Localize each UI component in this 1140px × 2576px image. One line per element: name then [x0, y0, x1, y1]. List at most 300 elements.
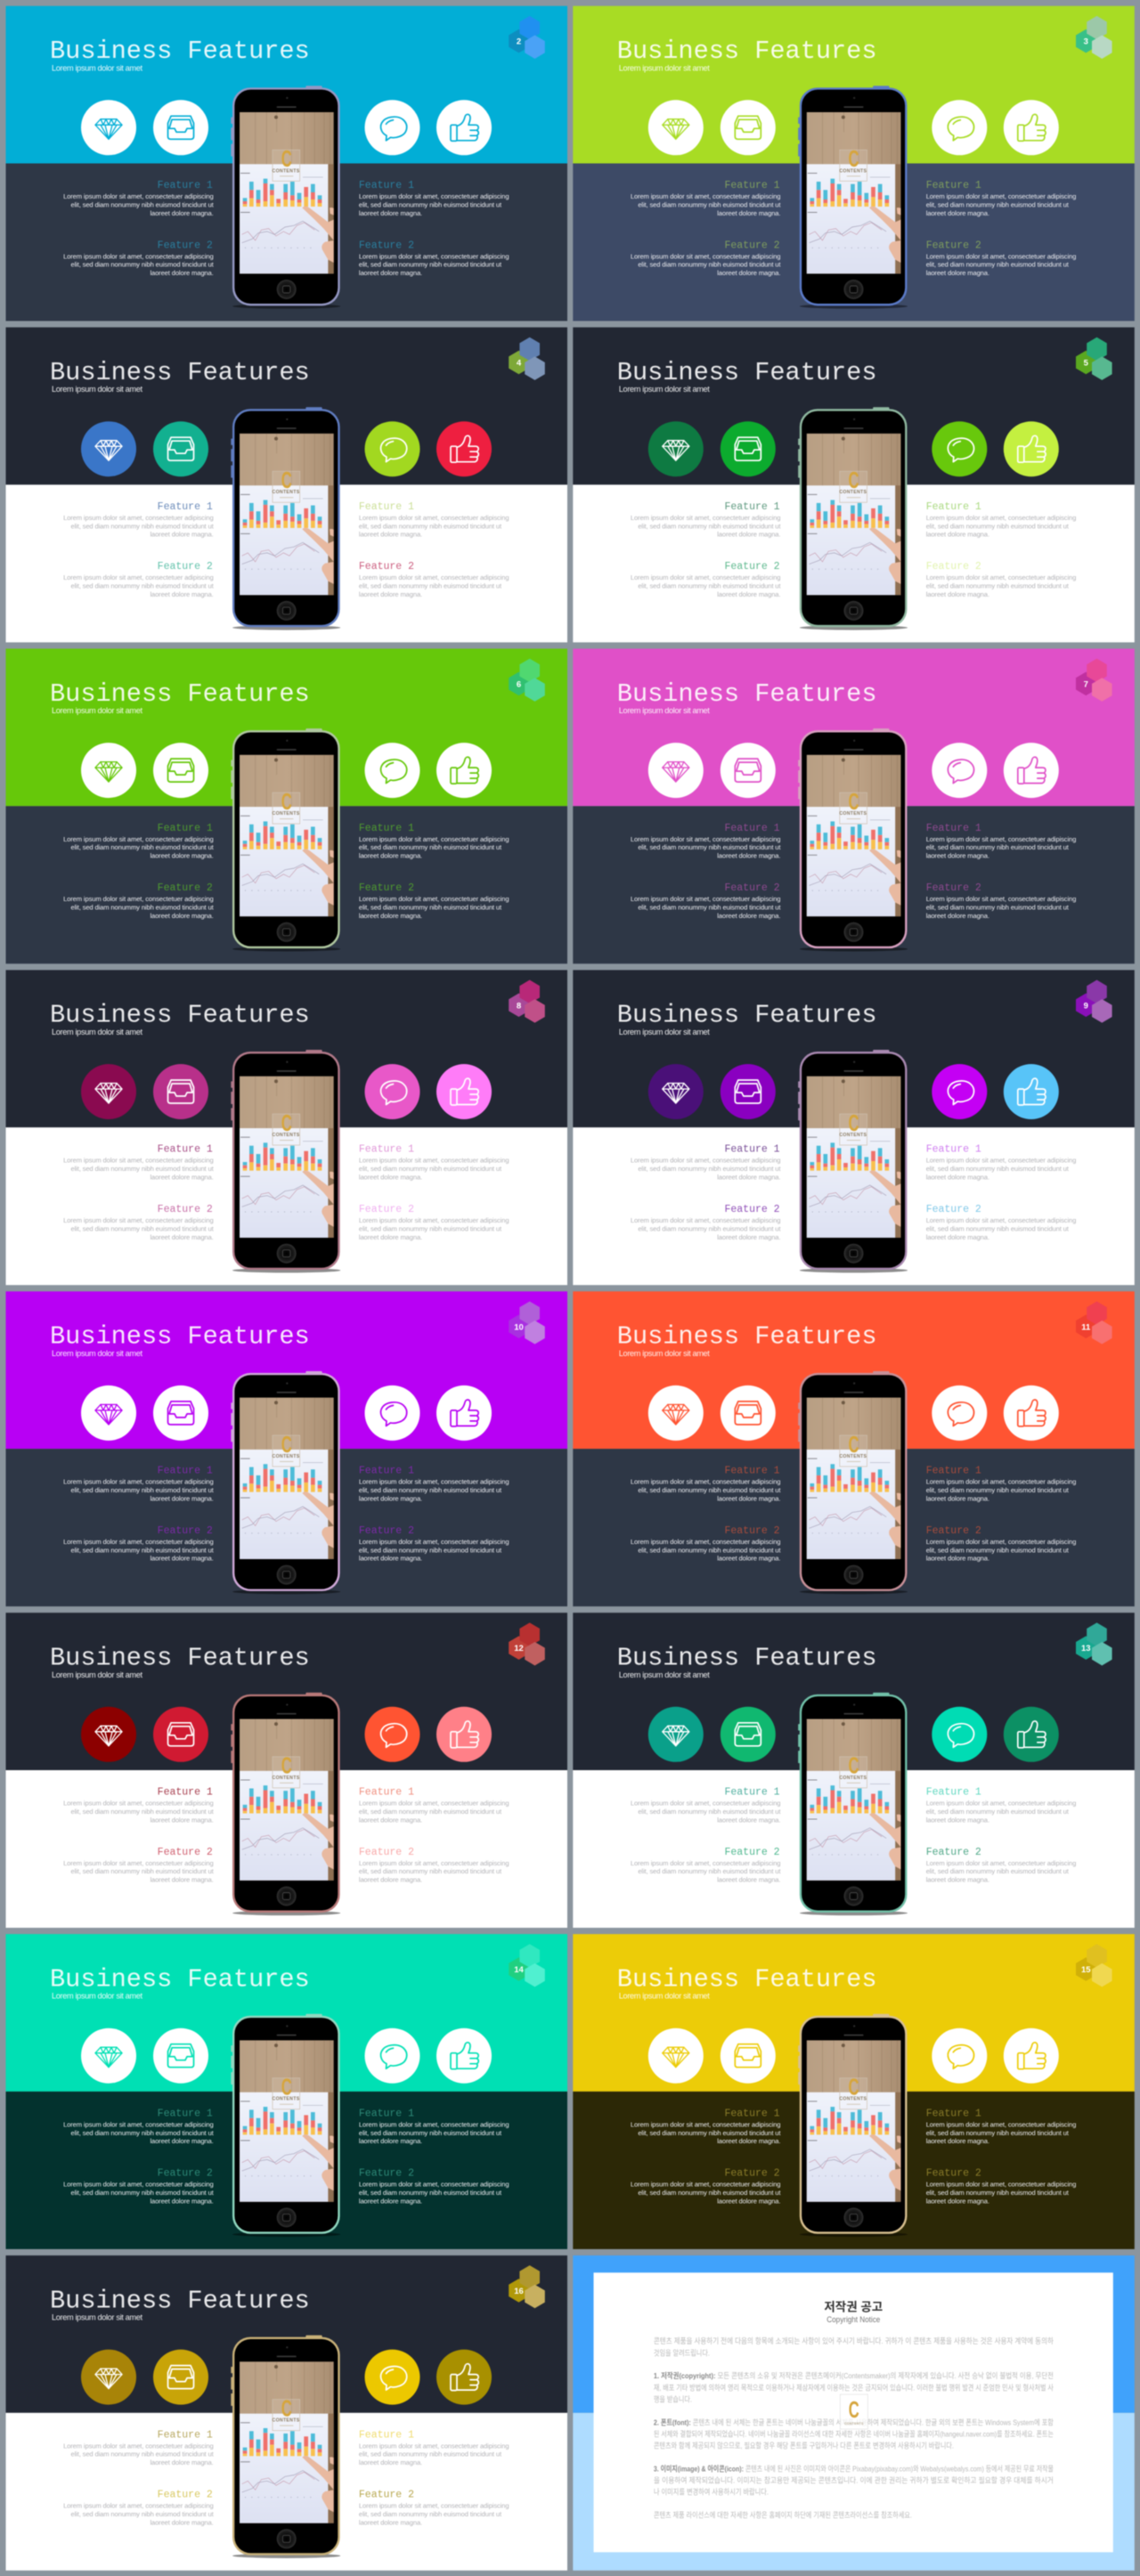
feature right 2: laoreet dolore magna.	[359, 1876, 422, 1884]
feature left 1	[63, 180, 215, 217]
feature right 1: laoreet dolore magna.	[926, 1174, 989, 1182]
feature right 2: Feature 2	[359, 882, 414, 894]
feature left 1	[63, 1144, 215, 1181]
feature left 1: Lorem ipsum dolor sit amet, consectetuer adipiscing	[63, 514, 214, 522]
icon: thumbs up	[1004, 743, 1059, 798]
feature left 1: Feature 1	[158, 2429, 213, 2441]
section 1 copyright: 재, 배포 기타 방법에 의하여 영리 목적으로 이용하거나 제삼자에게 이용하는 것은 금지되어 있습니다. 이러한 불법 행위 발견 시 준엄한 민사 및 형사처벌 사	[654, 2382, 1054, 2392]
feature left 2	[63, 561, 215, 598]
logo badge	[840, 2394, 867, 2429]
icon: tray	[153, 743, 208, 798]
feature left 2: laoreet dolore magna.	[150, 2198, 214, 2206]
phone: C	[848, 2074, 859, 2101]
panel: slide 13	[573, 1613, 1135, 1928]
feature left 2	[63, 1204, 215, 1241]
icon: diamond	[648, 2028, 704, 2084]
feature right 2: Lorem ipsum dolor sit amet, consectetuer adipiscing	[359, 895, 509, 903]
phone: C	[281, 1431, 292, 1458]
feature left 1: Feature 1	[724, 1144, 780, 1156]
icon: speech bubble	[365, 2350, 420, 2405]
page number badge	[1076, 1622, 1112, 1665]
feature right 1: elit, sed diam nonummy nibh euismod tincidunt ut	[359, 843, 502, 851]
subtitle: Lorem ipsum dolor sit amet	[52, 706, 142, 715]
section 3 image and icon: 을 이용하여 제작되었습니다. 이미지는 참고용만 제공되는 콘텐츠입니다. 이에 관한 권리는 귀하가 별도로 확인하고 필요할 경우 대체를 하시거	[654, 2475, 1054, 2485]
page number badge: 15	[1081, 1965, 1091, 1975]
feature left 1: laoreet dolore magna.	[150, 2137, 214, 2145]
feature right 1: laoreet dolore magna.	[359, 2458, 422, 2466]
feature right 1: laoreet dolore magna.	[926, 1494, 989, 1502]
feature left 1	[631, 1786, 781, 1824]
feature left 2: elit, sed diam nonummy nibh euismod tincidunt ut	[71, 582, 215, 590]
feature right 2: Feature 2	[359, 561, 414, 573]
page number badge: 5	[1084, 359, 1089, 369]
panel: slide 12	[5, 1613, 567, 1928]
icon: thumbs up	[436, 2350, 492, 2405]
feature right 1: laoreet dolore magna.	[359, 209, 422, 217]
feature right 2	[359, 882, 509, 920]
feature left 2: Feature 2	[158, 2168, 213, 2180]
feature left 2: Feature 2	[724, 1204, 780, 1215]
feature left 1: Lorem ipsum dolor sit amet, consectetuer adipiscing	[63, 1157, 214, 1165]
feature right 1	[926, 1144, 1076, 1181]
page number badge	[1076, 980, 1112, 1023]
feature left 2: Feature 2	[724, 240, 780, 251]
feature right 1: Feature 1	[926, 501, 981, 513]
icon: tray	[153, 1064, 208, 1119]
phone: CONTENTS	[273, 2097, 300, 2102]
feature left 2	[631, 561, 781, 598]
feature left 1: Lorem ipsum dolor sit amet, consectetuer adipiscing	[631, 1478, 780, 1486]
feature left 2: Lorem ipsum dolor sit amet, consectetuer adipiscing	[631, 573, 780, 581]
feature right 1: Feature 1	[926, 1144, 981, 1156]
feature left 1: elit, sed diam nonummy nibh euismod tincidunt ut	[638, 200, 781, 208]
feature right 1: laoreet dolore magna.	[926, 209, 989, 217]
feature right 1: Lorem ipsum dolor sit amet, consectetuer adipiscing	[926, 514, 1076, 522]
logo badge: C	[849, 2396, 859, 2423]
feature left 2: Feature 2	[724, 561, 780, 573]
feature right 2: Lorem ipsum dolor sit amet, consectetuer adipiscing	[359, 2181, 509, 2189]
phone: CONTENTS	[839, 811, 867, 817]
feature left 2: elit, sed diam nonummy nibh euismod tincidunt ut	[71, 1867, 215, 1875]
phone: C	[848, 1431, 859, 1458]
bottom band	[5, 2413, 567, 2571]
feature right 2	[926, 561, 1076, 598]
feature right 1: Lorem ipsum dolor sit amet, consectetuer adipiscing	[359, 2120, 509, 2128]
subtitle: Lorem ipsum dolor sit amet	[619, 706, 710, 715]
feature left 1: elit, sed diam nonummy nibh euismod tincidunt ut	[71, 1486, 215, 1494]
page number badge	[509, 1301, 545, 1345]
feature left 2: Lorem ipsum dolor sit amet, consectetuer adipiscing	[631, 895, 780, 903]
panel: slide 4	[5, 328, 567, 642]
feature right 2: Feature 2	[926, 561, 981, 573]
feature right 2: elit, sed diam nonummy nibh euismod tincidunt ut	[359, 1224, 502, 1232]
icon: tray	[721, 2028, 776, 2084]
bottom band	[5, 1770, 567, 1928]
feature left 1: elit, sed diam nonummy nibh euismod tincidunt ut	[71, 522, 215, 530]
feature left 1: elit, sed diam nonummy nibh euismod tincidunt ut	[71, 1165, 215, 1173]
icon: speech bubble	[365, 421, 420, 476]
feature left 2	[631, 1847, 781, 1884]
page number badge: 2	[517, 37, 521, 47]
phone: CONTENTS	[839, 1133, 867, 1138]
phone	[798, 407, 908, 630]
bottom band	[5, 806, 567, 963]
feature left 1: Lorem ipsum dolor sit amet, consectetuer adipiscing	[63, 2120, 214, 2128]
feature right 2	[926, 882, 1076, 920]
icon: tray	[721, 1386, 776, 1441]
feature left 2: Lorem ipsum dolor sit amet, consectetuer adipiscing	[631, 1859, 780, 1867]
feature right 1: Feature 1	[359, 1144, 414, 1156]
panel: slide 16	[5, 2255, 567, 2571]
icon: thumbs up	[1004, 100, 1059, 155]
feature left 2: elit, sed diam nonummy nibh euismod tincidunt ut	[638, 582, 781, 590]
icon: diamond	[648, 421, 704, 476]
phone: CONTENTS	[273, 168, 300, 174]
feature left 1: laoreet dolore magna.	[717, 1174, 780, 1182]
feature right 1	[926, 180, 1076, 217]
icon: speech bubble	[365, 2028, 420, 2084]
feature right 2	[926, 2168, 1076, 2205]
feature right 2	[359, 1525, 509, 1563]
feature left 1: elit, sed diam nonummy nibh euismod tincidunt ut	[71, 843, 215, 851]
feature right 1: Lorem ipsum dolor sit amet, consectetuer adipiscing	[359, 1157, 509, 1165]
feature right 1: laoreet dolore magna.	[359, 531, 422, 539]
feature right 1: Feature 1	[359, 2429, 414, 2441]
subtitle: Lorem ipsum dolor sit amet	[52, 385, 142, 394]
feature right 1: laoreet dolore magna.	[359, 1816, 422, 1824]
icon: thumbs up	[436, 1386, 492, 1441]
feature left 1: elit, sed diam nonummy nibh euismod tincidunt ut	[638, 1808, 781, 1816]
feature right 1	[359, 1786, 509, 1824]
feature right 1: laoreet dolore magna.	[359, 2137, 422, 2145]
feature right 2: laoreet dolore magna.	[926, 1876, 989, 1884]
feature left 2: elit, sed diam nonummy nibh euismod tincidunt ut	[71, 261, 215, 269]
feature right 2	[359, 1847, 509, 1884]
feature right 1	[359, 1466, 509, 1502]
feature left 2: laoreet dolore magna.	[717, 269, 780, 277]
feature right 2	[926, 1525, 1076, 1563]
feature left 2: laoreet dolore magna.	[717, 1876, 780, 1884]
feature left 1: laoreet dolore magna.	[717, 209, 780, 217]
feature left 2	[63, 2490, 215, 2526]
icon: thumbs up	[436, 1707, 492, 1762]
feature left 2: laoreet dolore magna.	[717, 1233, 780, 1241]
feature right 1	[926, 501, 1076, 539]
feature left 1: laoreet dolore magna.	[717, 1816, 780, 1824]
feature right 2: laoreet dolore magna.	[359, 1555, 422, 1563]
feature right 2: Lorem ipsum dolor sit amet, consectetuer adipiscing	[926, 573, 1076, 581]
feature left 1: laoreet dolore magna.	[150, 1174, 214, 1182]
top band	[573, 6, 1135, 164]
feature left 1: Lorem ipsum dolor sit amet, consectetuer adipiscing	[63, 1478, 214, 1486]
feature right 2: elit, sed diam nonummy nibh euismod tincidunt ut	[359, 2189, 502, 2197]
feature left 2: elit, sed diam nonummy nibh euismod tincidunt ut	[638, 2189, 781, 2197]
feature right 2: Feature 2	[359, 1204, 414, 1215]
top band	[5, 1934, 567, 2092]
icon: speech bubble	[932, 2028, 987, 2084]
icon: thumbs up	[436, 2028, 492, 2084]
feature left 1: Lorem ipsum dolor sit amet, consectetuer adipiscing	[63, 835, 214, 843]
feature left 2: elit, sed diam nonummy nibh euismod tincidunt ut	[638, 1546, 781, 1554]
top band	[5, 1291, 567, 1449]
feature right 1	[926, 1466, 1076, 1502]
feature left 2: laoreet dolore magna.	[150, 1555, 214, 1563]
page number badge	[509, 659, 545, 702]
feature right 1: elit, sed diam nonummy nibh euismod tincidunt ut	[359, 1808, 502, 1816]
feature right 1: elit, sed diam nonummy nibh euismod tincidunt ut	[359, 2129, 502, 2137]
feature left 1: laoreet dolore magna.	[150, 1494, 214, 1502]
feature left 1: elit, sed diam nonummy nibh euismod tincidunt ut	[638, 1486, 781, 1494]
feature right 1: Lorem ipsum dolor sit amet, consectetuer adipiscing	[359, 1478, 509, 1486]
icon: thumbs up	[1004, 1707, 1059, 1762]
feature right 2	[359, 1204, 509, 1241]
page number badge: 13	[1081, 1644, 1091, 1654]
feature left 1: Lorem ipsum dolor sit amet, consectetuer adipiscing	[63, 2442, 214, 2450]
phone: CONTENTS	[839, 490, 867, 495]
phone	[798, 1371, 908, 1594]
feature right 2	[359, 561, 509, 598]
title: Business Features	[617, 1643, 877, 1672]
section 1 copyright	[654, 2370, 1054, 2404]
feature left 1: Lorem ipsum dolor sit amet, consectetuer adipiscing	[631, 835, 780, 843]
feature right 1: elit, sed diam nonummy nibh euismod tincidunt ut	[926, 1486, 1070, 1494]
feature right 2: elit, sed diam nonummy nibh euismod tincidunt ut	[359, 903, 502, 912]
feature left 2: Lorem ipsum dolor sit amet, consectetuer adipiscing	[63, 2502, 214, 2510]
feature left 2: elit, sed diam nonummy nibh euismod tincidunt ut	[638, 903, 781, 912]
page number badge: 11	[1081, 1322, 1091, 1332]
feature right 2: Lorem ipsum dolor sit amet, consectetuer adipiscing	[359, 573, 509, 581]
icon: diamond	[648, 100, 704, 155]
feature left 2: Lorem ipsum dolor sit amet, consectetuer adipiscing	[63, 1538, 214, 1546]
icon: speech bubble	[932, 100, 987, 155]
page number badge: 14	[514, 1965, 524, 1975]
phone: C	[848, 1752, 859, 1779]
page number badge: 9	[1084, 1001, 1088, 1011]
phone	[798, 2014, 908, 2237]
phone	[231, 2336, 340, 2558]
feature left 2: Lorem ipsum dolor sit amet, consectetuer adipiscing	[631, 252, 780, 260]
phone	[231, 85, 340, 309]
icon: tray	[153, 2350, 208, 2405]
feature right 2	[926, 1204, 1076, 1241]
feature left 2: Lorem ipsum dolor sit amet, consectetuer adipiscing	[631, 2181, 780, 2189]
bottom band	[5, 1127, 567, 1285]
feature left 2	[631, 1204, 781, 1241]
feature left 2: laoreet dolore magna.	[150, 1233, 214, 1241]
feature right 2: elit, sed diam nonummy nibh euismod tincidunt ut	[926, 261, 1070, 269]
icon: tray	[153, 100, 208, 155]
feature left 2: laoreet dolore magna.	[717, 2198, 780, 2206]
feature left 1: elit, sed diam nonummy nibh euismod tincidunt ut	[71, 2450, 215, 2458]
feature left 2: Lorem ipsum dolor sit amet, consectetuer adipiscing	[63, 895, 214, 903]
feature right 2: elit, sed diam nonummy nibh euismod tincidunt ut	[926, 1546, 1070, 1554]
feature left 2: Feature 2	[724, 882, 780, 894]
feature right 1: elit, sed diam nonummy nibh euismod tincidunt ut	[359, 1486, 502, 1494]
panel: slide 11	[573, 1291, 1135, 1606]
top band	[5, 648, 567, 806]
phone	[231, 1050, 340, 1272]
feature right 1: elit, sed diam nonummy nibh euismod tincidunt ut	[926, 200, 1070, 208]
phone: C	[281, 1752, 292, 1779]
phone: CONTENTS	[273, 2418, 300, 2424]
feature left 2: elit, sed diam nonummy nibh euismod tincidunt ut	[638, 1867, 781, 1875]
icon: thumbs up	[1004, 421, 1059, 476]
page number badge: 6	[517, 680, 521, 689]
page number badge: 7	[1084, 680, 1088, 689]
feature left 1: Feature 1	[158, 823, 213, 834]
feature left 1: Lorem ipsum dolor sit amet, consectetuer adipiscing	[63, 192, 214, 200]
feature right 2: laoreet dolore magna.	[359, 1233, 422, 1241]
phone	[231, 728, 340, 951]
title: Business Features	[50, 1964, 310, 1994]
feature right 1: laoreet dolore magna.	[926, 852, 989, 860]
top band	[5, 970, 567, 1127]
phone	[798, 85, 908, 309]
top band	[573, 2255, 1135, 2413]
phone: C	[281, 145, 292, 172]
feature right 2: elit, sed diam nonummy nibh euismod tincidunt ut	[359, 1867, 502, 1875]
icon: tray	[721, 421, 776, 476]
top band	[573, 648, 1135, 806]
feature right 1	[359, 1144, 509, 1181]
feature right 2: laoreet dolore magna.	[926, 1233, 989, 1241]
title: Business Features	[50, 358, 310, 387]
feature right 1: laoreet dolore magna.	[926, 1816, 989, 1824]
feature right 2: Feature 2	[359, 1847, 414, 1858]
phone	[231, 407, 340, 630]
subheading: Copyright Notice	[826, 2315, 880, 2325]
feature left 1	[63, 2108, 215, 2145]
icon: thumbs up	[436, 100, 492, 155]
feature right 1: Feature 1	[359, 501, 414, 513]
subtitle: Lorem ipsum dolor sit amet	[619, 1349, 710, 1358]
section 3 image and icon: 3. 이미지(image) & 아이콘(icon): 콘텐츠 내에 된 사진은 이미지와 아이콘은 Pixabay(pixabay.com)와 Webalys(webalys.com) 등에서 제공된 무료 저작물	[654, 2463, 1054, 2473]
feature right 1: laoreet dolore magna.	[926, 2137, 989, 2145]
feature right 2: Lorem ipsum dolor sit amet, consectetuer adipiscing	[359, 1216, 509, 1224]
feature left 1: elit, sed diam nonummy nibh euismod tincidunt ut	[638, 843, 781, 851]
page number badge	[509, 1944, 545, 1987]
feature right 1: elit, sed diam nonummy nibh euismod tincidunt ut	[926, 1165, 1070, 1173]
feature left 1: elit, sed diam nonummy nibh euismod tincidunt ut	[638, 522, 781, 530]
feature left 2	[631, 882, 781, 920]
phone: CONTENTS	[839, 2097, 867, 2102]
feature right 1: Lorem ipsum dolor sit amet, consectetuer adipiscing	[926, 192, 1076, 200]
feature left 1	[631, 1144, 781, 1181]
subtitle: Lorem ipsum dolor sit amet	[619, 1670, 710, 1679]
icon: speech bubble	[365, 100, 420, 155]
bottom band	[5, 164, 567, 321]
title: Business Features	[50, 1643, 310, 1672]
page number badge: 12	[514, 1644, 524, 1654]
feature right 1: Feature 1	[359, 1786, 414, 1798]
icon: diamond	[81, 1707, 136, 1762]
section 2 font: 된 서체와 결합되어 제작되었습니다. 네이버 나눔글꼴 라이선스에 대한 자세한 사항은 네이버 나눔글꼴 홈페이지(hangeul.naver.com)를 참조하세요. 폰트는	[654, 2428, 1054, 2438]
feature left 1: Feature 1	[724, 1786, 780, 1798]
subtitle: Lorem ipsum dolor sit amet	[52, 63, 142, 72]
panel: slide 10	[5, 1291, 567, 1606]
feature left 1: Feature 1	[724, 1466, 780, 1477]
icon: speech bubble	[365, 1386, 420, 1441]
phone: CONTENTS	[273, 811, 300, 817]
subtitle: Lorem ipsum dolor sit amet	[619, 1028, 710, 1036]
bottom band	[573, 2092, 1135, 2249]
phone	[231, 2014, 340, 2237]
page number badge	[509, 2265, 545, 2308]
feature right 2: Lorem ipsum dolor sit amet, consectetuer adipiscing	[926, 1859, 1076, 1867]
feature right 1: Lorem ipsum dolor sit amet, consectetuer adipiscing	[926, 1799, 1076, 1807]
feature right 1	[926, 2108, 1076, 2145]
phone	[798, 1050, 908, 1272]
feature right 2: laoreet dolore magna.	[359, 912, 422, 920]
feature left 2: laoreet dolore magna.	[717, 590, 780, 598]
icon: thumbs up	[436, 421, 492, 476]
feature left 2	[63, 240, 215, 277]
feature right 1	[359, 2108, 509, 2145]
section 1 copyright: 행을 받습니다.	[654, 2394, 692, 2404]
icon: diamond	[81, 743, 136, 798]
feature left 1: Lorem ipsum dolor sit amet, consectetuer adipiscing	[631, 1157, 780, 1165]
feature left 2: Feature 2	[724, 2168, 780, 2180]
feature right 1: Lorem ipsum dolor sit amet, consectetuer adipiscing	[359, 2442, 509, 2450]
feature right 1: elit, sed diam nonummy nibh euismod tincidunt ut	[359, 2450, 502, 2458]
feature left 2	[631, 2168, 781, 2205]
phone: C	[281, 1109, 292, 1136]
feature right 1: Feature 1	[926, 1466, 981, 1477]
icon: thumbs up	[436, 743, 492, 798]
feature right 1	[359, 823, 509, 860]
icon: diamond	[648, 1064, 704, 1119]
feature left 1	[63, 823, 215, 860]
page number badge	[509, 337, 545, 380]
feature left 2: Feature 2	[158, 240, 213, 251]
panel: slide 5	[573, 328, 1135, 642]
icon: tray	[721, 1707, 776, 1762]
panel: slide 7	[573, 648, 1135, 963]
feature right 1: elit, sed diam nonummy nibh euismod tincidunt ut	[926, 1808, 1070, 1816]
bottom band	[573, 1449, 1135, 1606]
feature left 1: Feature 1	[724, 180, 780, 191]
section 1 copyright: 1. 저작권(copyright): 모든 콘텐츠의 소유 및 저작권은 콘텐츠메이커(Contentsmaker)의 제작자에게 있습니다. 사전 승낙 없이 불법적 이용, 무단전	[654, 2370, 1054, 2380]
page number badge	[509, 980, 545, 1023]
feature right 2: elit, sed diam nonummy nibh euismod tincidunt ut	[926, 903, 1070, 912]
top band	[573, 1291, 1135, 1449]
feature left 1: elit, sed diam nonummy nibh euismod tincidunt ut	[638, 1165, 781, 1173]
feature right 2	[359, 2168, 509, 2205]
feature right 2: Lorem ipsum dolor sit amet, consectetuer adipiscing	[926, 252, 1076, 260]
feature right 1: Feature 1	[926, 823, 981, 834]
feature right 2: elit, sed diam nonummy nibh euismod tincidunt ut	[359, 1546, 502, 1554]
feature left 1	[63, 2429, 215, 2466]
phone: C	[848, 145, 859, 172]
phone: C	[848, 788, 859, 815]
phone: C	[848, 1109, 859, 1136]
feature right 2: laoreet dolore magna.	[926, 2198, 989, 2206]
page number badge: 10	[514, 1322, 524, 1332]
feature left 1: elit, sed diam nonummy nibh euismod tincidunt ut	[71, 1808, 215, 1816]
feature right 2: laoreet dolore magna.	[926, 1555, 989, 1563]
phone: CONTENTS	[839, 1776, 867, 1781]
feature left 1: laoreet dolore magna.	[717, 1494, 780, 1502]
page number badge: 4	[517, 359, 522, 369]
top band	[5, 328, 567, 484]
feature left 2	[63, 1525, 215, 1563]
feature left 1: Lorem ipsum dolor sit amet, consectetuer adipiscing	[631, 192, 780, 200]
feature left 2: laoreet dolore magna.	[150, 590, 214, 598]
icon: diamond	[648, 743, 704, 798]
feature left 2: Feature 2	[724, 1847, 780, 1858]
feature left 1	[631, 180, 781, 217]
feature right 2: Lorem ipsum dolor sit amet, consectetuer adipiscing	[926, 1216, 1076, 1224]
